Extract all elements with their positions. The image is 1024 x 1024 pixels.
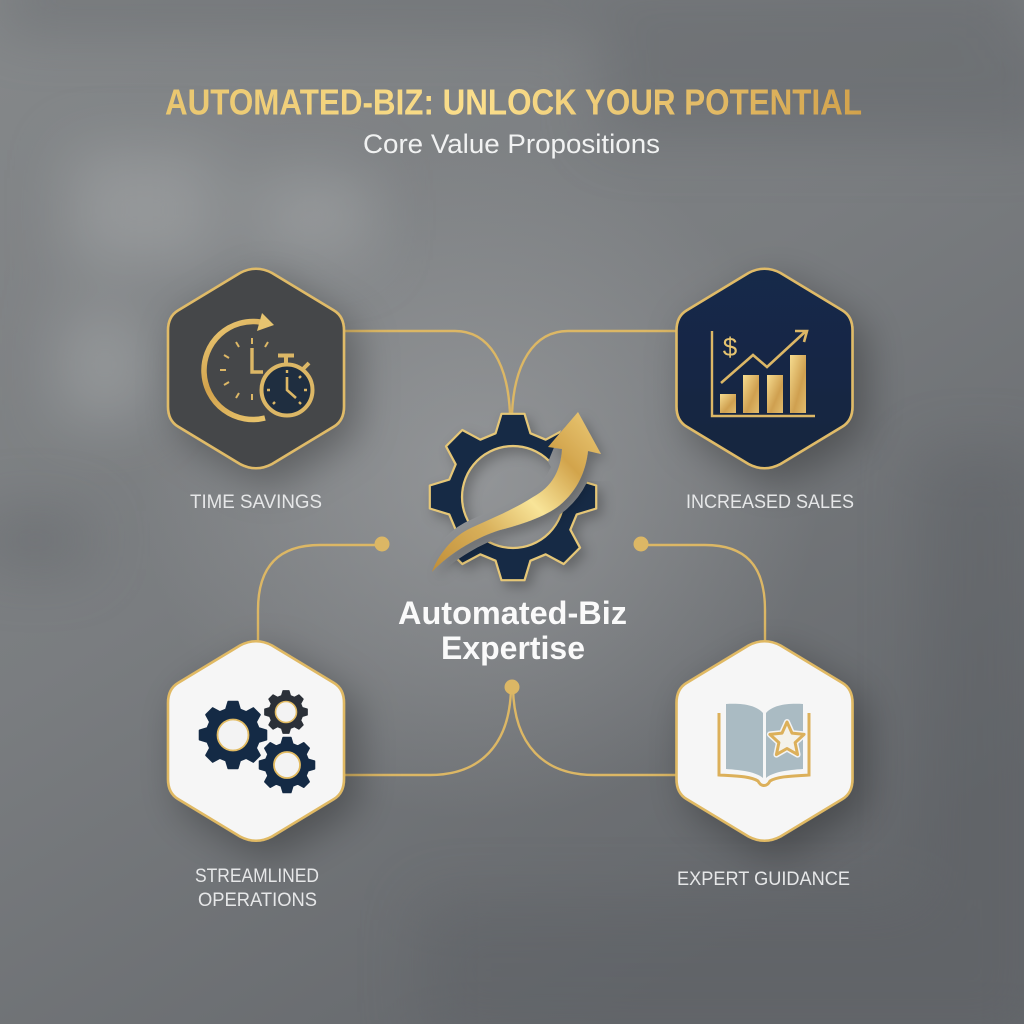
center label xyxy=(398,595,627,666)
icon: growth bar chart: $ xyxy=(723,332,738,362)
panel: streamlined operations hexagon xyxy=(168,641,344,841)
connectors xyxy=(258,331,765,775)
icon: growth bar chart xyxy=(712,331,815,416)
center label: Automated-Biz xyxy=(398,595,627,631)
panel: time savings hexagon xyxy=(168,269,344,468)
title: AUTOMATED-BIZ: UNLOCK YOUR POTENTIAL xyxy=(165,82,862,122)
panel: expert guidance hexagon xyxy=(676,641,852,841)
central gear and arrow icon xyxy=(430,412,601,580)
label: streamlined operations xyxy=(195,866,319,911)
label: expert guidance: EXPERT GUIDANCE xyxy=(677,869,850,890)
label: increased sales: INCREASED SALES xyxy=(686,492,854,513)
label: time savings: TIME SAVINGS xyxy=(190,492,322,513)
label: streamlined operations: STREAMLINED xyxy=(195,866,319,887)
subtitle: Core Value Propositions xyxy=(363,129,660,159)
icon: open book with star xyxy=(719,704,809,786)
icon: clock and stopwatch xyxy=(204,313,312,419)
label: streamlined operations: OPERATIONS xyxy=(198,890,317,911)
icon: three gears xyxy=(200,691,314,792)
panel: increased sales hexagon xyxy=(676,269,852,468)
center label: Expertise xyxy=(441,630,585,666)
